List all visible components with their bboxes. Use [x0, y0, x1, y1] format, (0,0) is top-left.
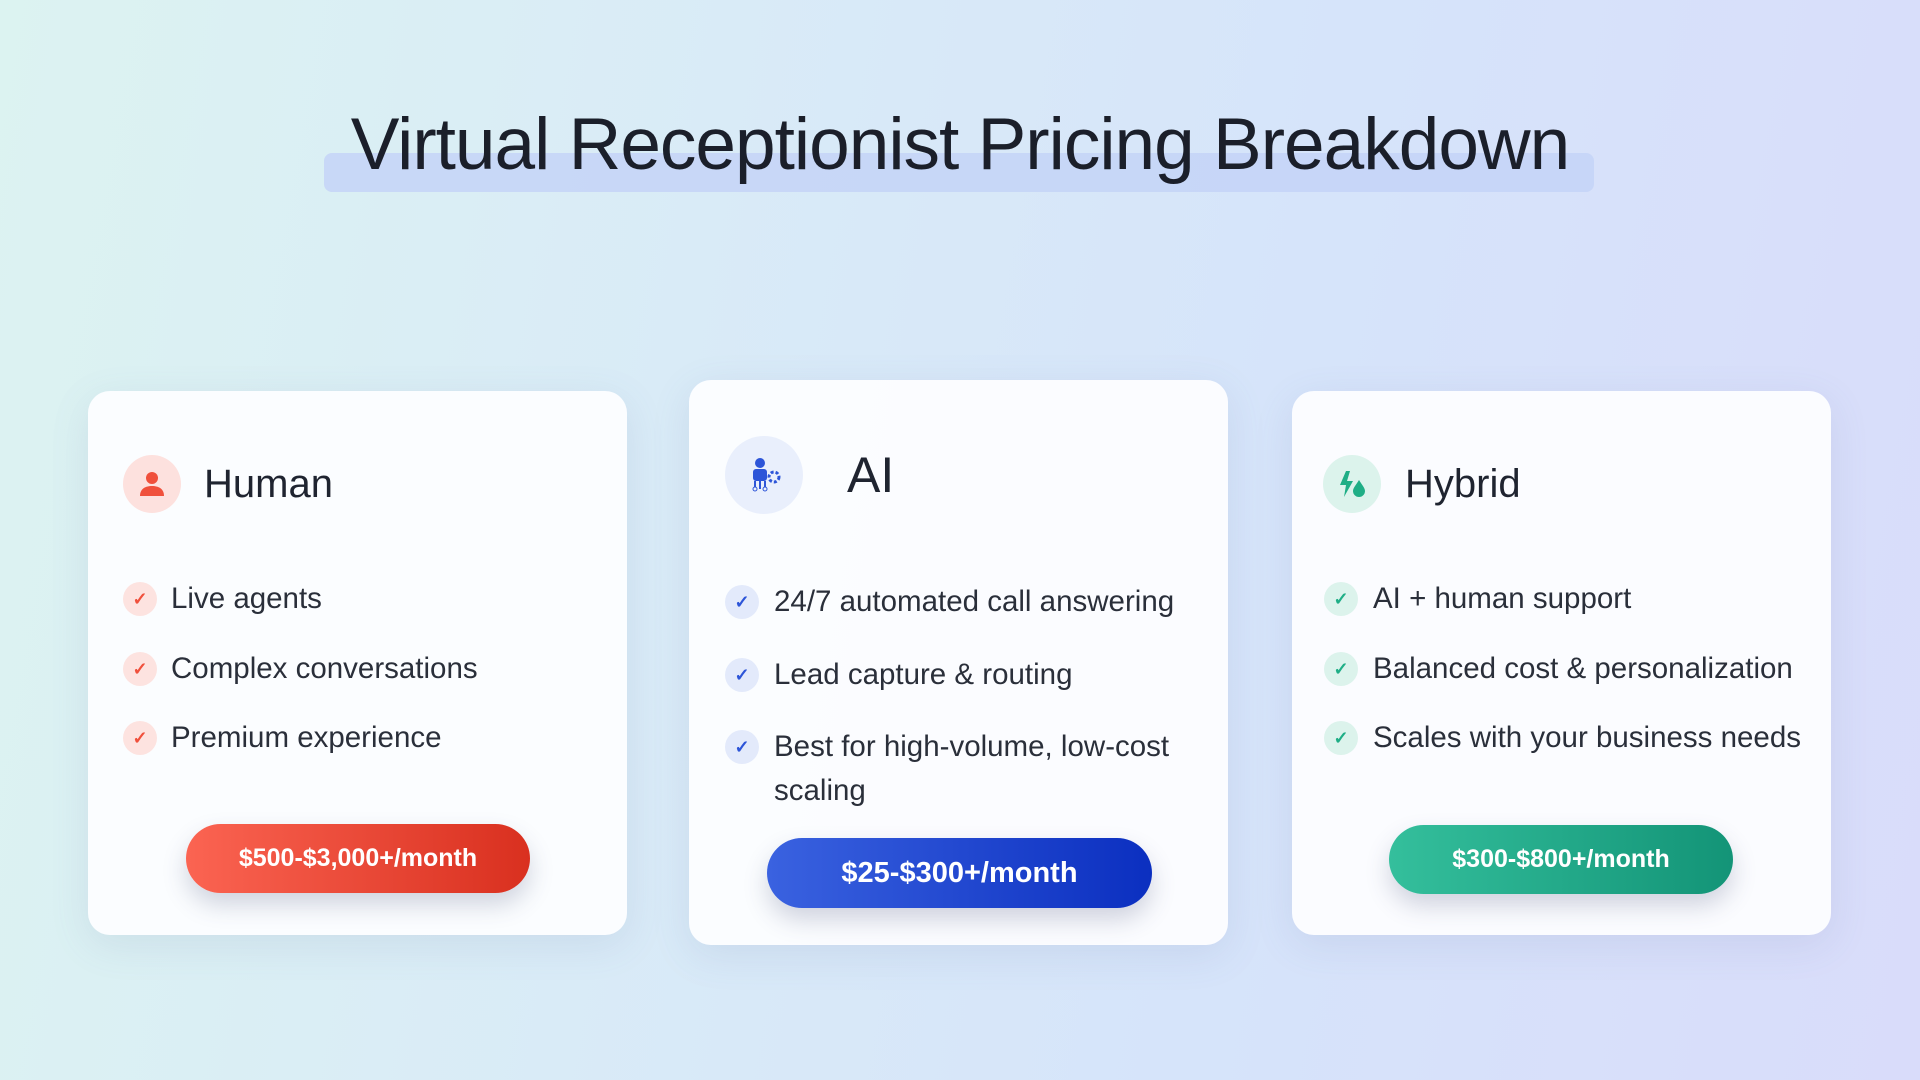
heading: Hybrid: Hybrid [1405, 462, 1521, 506]
panel: human [88, 391, 627, 935]
heading: AI: AI [847, 447, 894, 503]
list: Lead capture & routing [774, 658, 1072, 691]
list: 24/7 automated call answering [774, 585, 1174, 618]
title highlight [324, 153, 1594, 192]
list: ✓ [1333, 588, 1349, 608]
price button [767, 838, 1152, 908]
panel: hybrid [1292, 391, 1831, 935]
list: Best for high-volume, low-cost scaling [774, 730, 1169, 807]
panel: AI [689, 380, 1228, 945]
list: ✓ [132, 728, 148, 748]
list: Live agents [171, 582, 322, 615]
icon: robot [725, 436, 803, 514]
list: ✓ [132, 588, 148, 608]
list [123, 582, 478, 755]
icon: hybrid [1323, 455, 1381, 513]
price button: $300-$800+/month [1452, 845, 1670, 873]
list: ✓ [734, 592, 750, 612]
list: ✓ [1333, 658, 1349, 678]
list: Scales with your business needs [1373, 721, 1801, 754]
list: Premium experience [171, 721, 442, 754]
title: Virtual Receptionist Pricing Breakdown [351, 104, 1569, 185]
list [1324, 582, 1801, 755]
list [725, 585, 1174, 807]
list: ✓ [1333, 728, 1349, 748]
list: Balanced cost & personalization [1373, 652, 1793, 685]
list: Complex conversations [171, 652, 478, 685]
heading: Human: Human [204, 462, 333, 506]
list: ✓ [734, 664, 750, 684]
list: ✓ [734, 736, 750, 756]
price button [186, 824, 530, 893]
price button [1389, 825, 1733, 894]
price button: $25-$300+/month [841, 856, 1078, 888]
list: ✓ [132, 658, 148, 678]
list: AI + human support [1373, 582, 1631, 615]
icon: person [123, 455, 181, 513]
price button: $500-$3,000+/month [239, 844, 477, 872]
